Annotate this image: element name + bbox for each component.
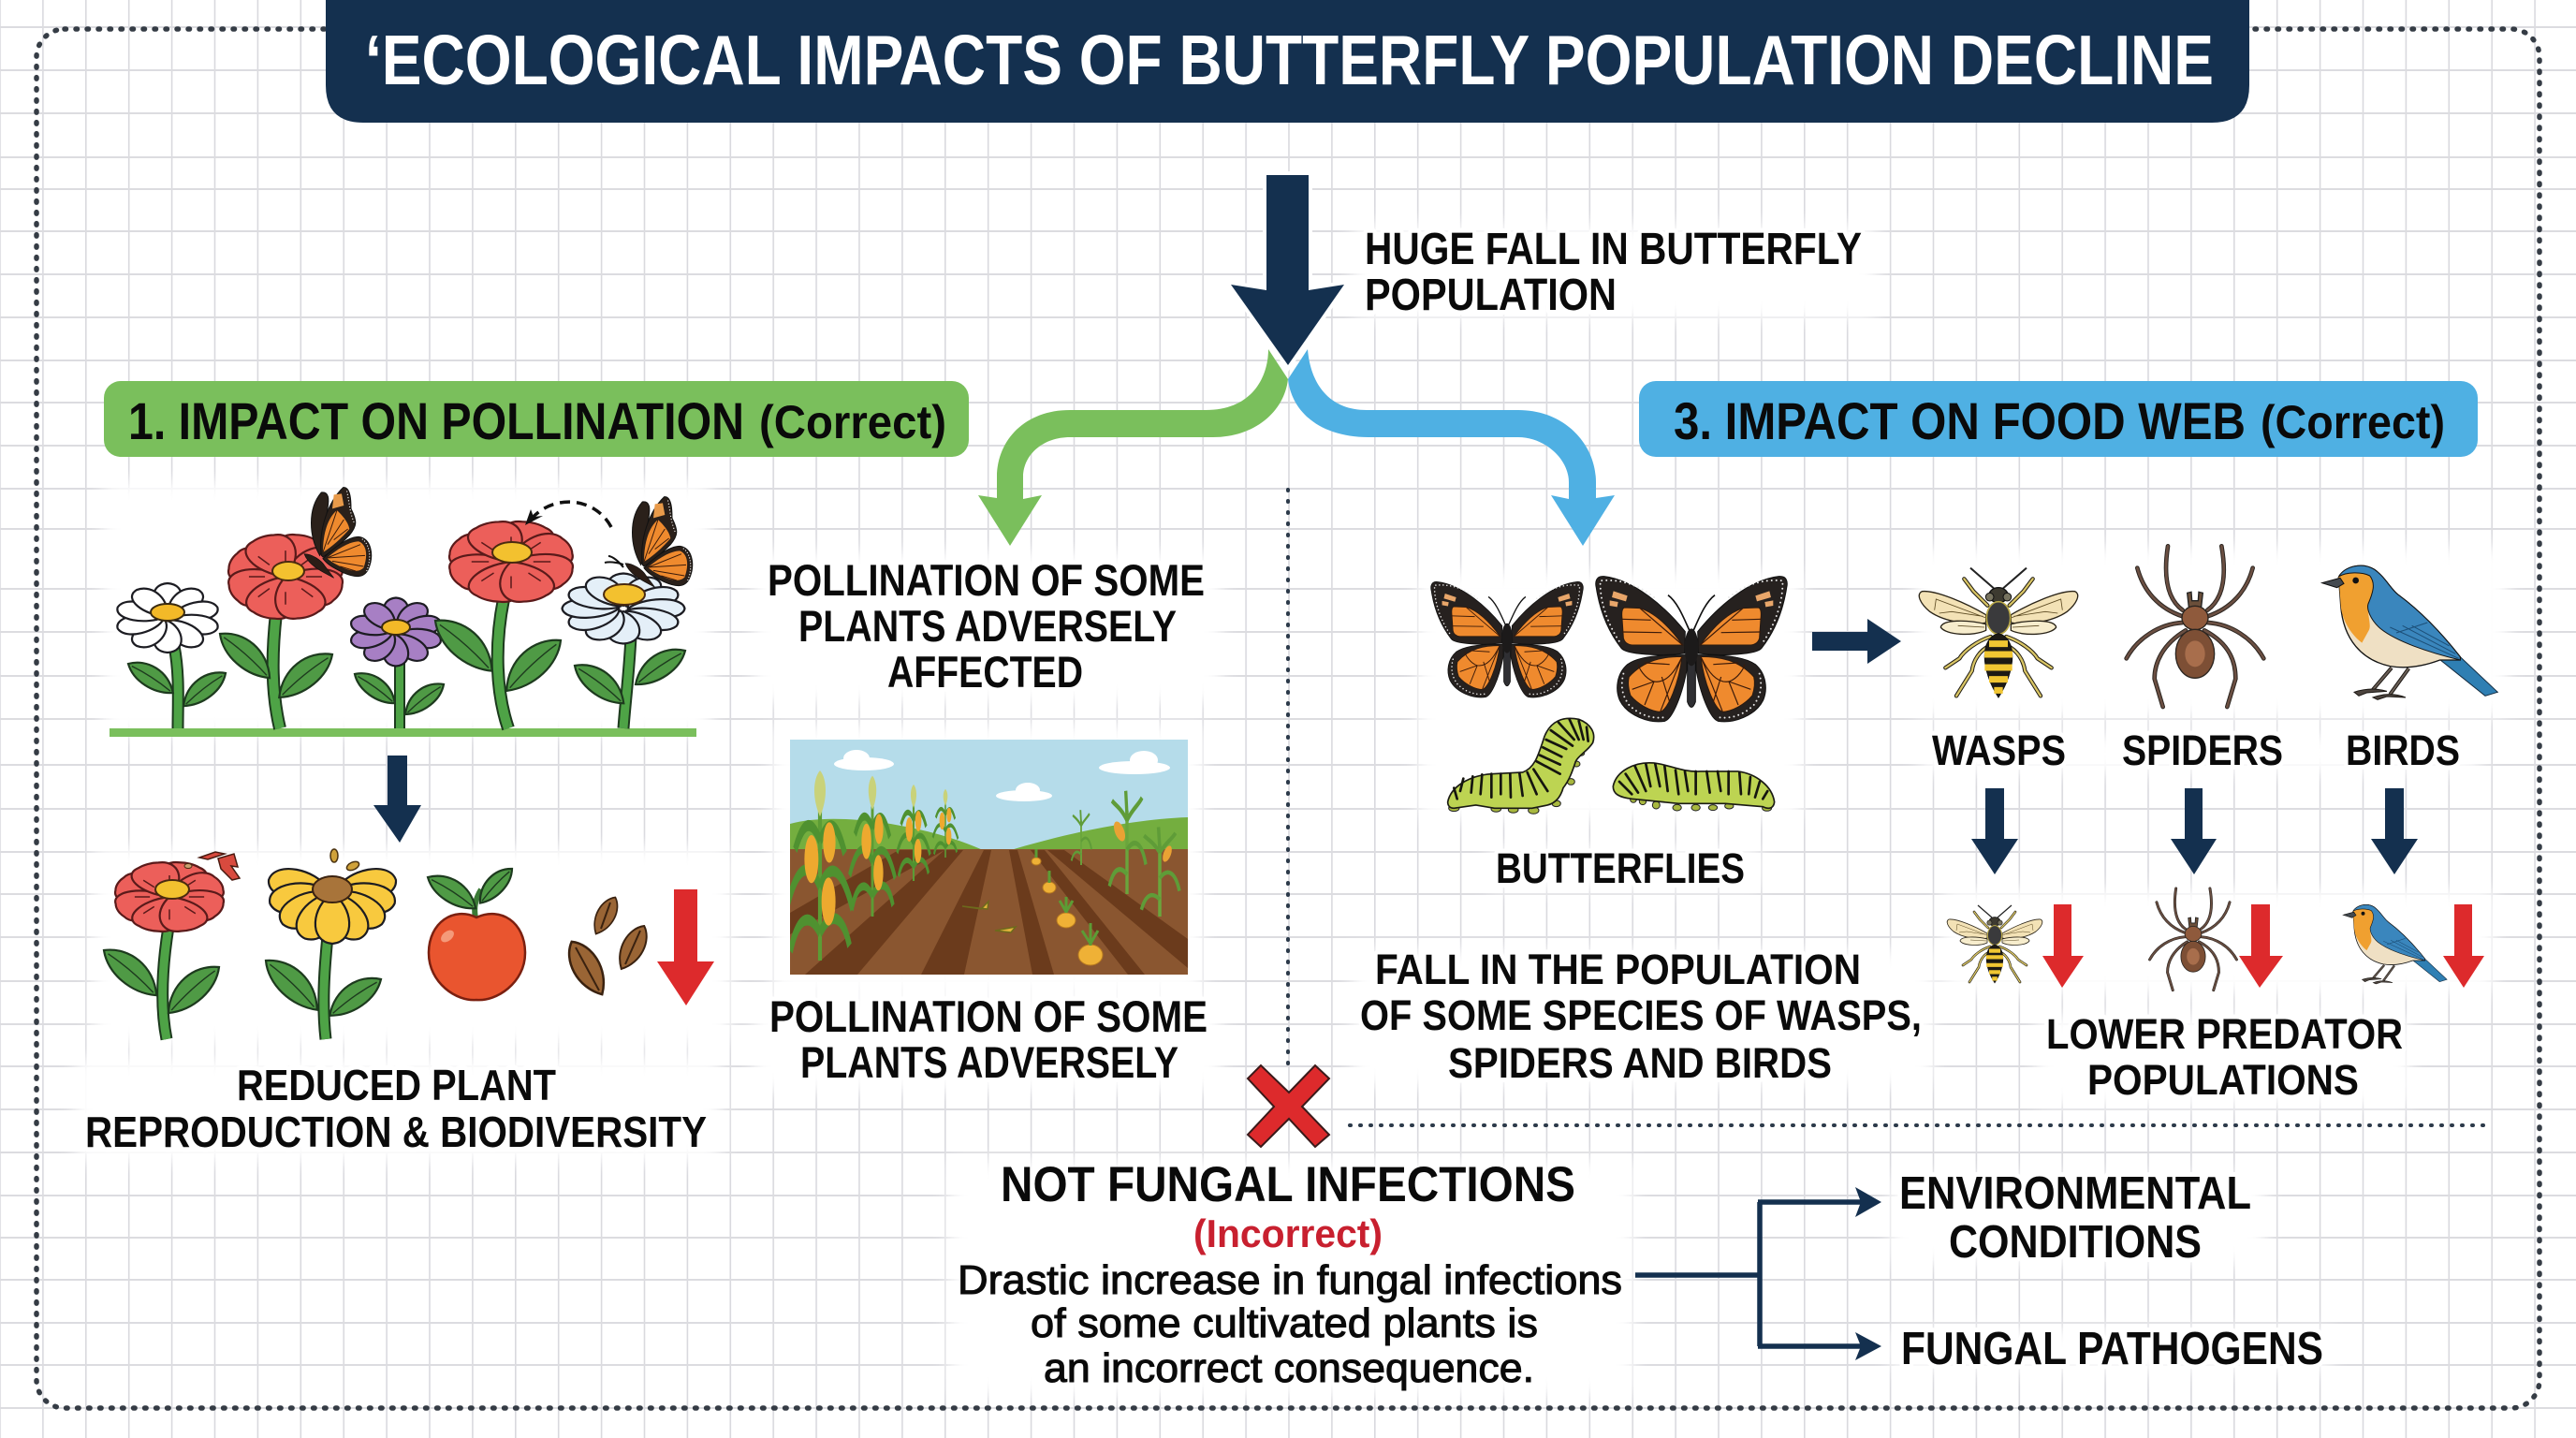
text: pollination affected <box>768 555 1205 697</box>
labels: predators <box>1932 726 2460 774</box>
icon: bird <box>2322 565 2497 699</box>
text: fungal pathogens: FUNGAL PATHOGENS <box>1901 1324 2323 1374</box>
icon: white daisy <box>113 583 231 728</box>
text: pollination affected: POLLINATION OF SOME <box>768 555 1205 605</box>
icon: arched caterpillar <box>1448 718 1594 814</box>
text: pollination affected: PLANTS ADVERSELY <box>798 601 1177 651</box>
heading: impact on pollination: 1. IMPACT ON POLLINATION <box>128 391 744 450</box>
label: butterflies: BUTTERFLIES <box>1496 844 1745 892</box>
arrow: red decrease <box>657 889 714 1005</box>
icon: apple <box>423 862 525 1000</box>
label: huge fall in butterfly population: POPULATION <box>1365 271 1617 320</box>
labels: predators: SPIDERS <box>2122 726 2283 774</box>
panel: impact on food web <box>1360 381 2497 1104</box>
icon: crawling caterpillar <box>1613 763 1775 811</box>
arrow: pollination down to outcomes <box>373 756 421 843</box>
label: huge fall in butterfly population <box>1365 225 1862 320</box>
text: reduced plant reproduction: REDUCED PLANT <box>237 1061 556 1109</box>
text: explanation <box>958 1257 1622 1391</box>
label: huge fall in butterfly population: HUGE FALL IN BUTTERFLY <box>1365 225 1862 274</box>
label: incorrect: (Incorrect) <box>1193 1211 1383 1255</box>
text: fall in population: OF SOME SPECIES OF WASPS, <box>1360 991 1922 1039</box>
icon: wasp <box>1919 568 2078 697</box>
heading: impact on food web <box>1639 381 2478 457</box>
text: environmental conditions <box>1899 1168 2251 1268</box>
text: fall in population <box>1360 946 1922 1087</box>
text: environmental conditions: ENVIRONMENTAL <box>1899 1168 2251 1219</box>
blue branch arrow <box>1288 349 1615 546</box>
text: explanation: of some cultivated plants is <box>1031 1300 1538 1346</box>
icon: red cross <box>1248 1065 1329 1147</box>
text: lower predator populations <box>2046 1010 2403 1104</box>
text: lower predator populations: POPULATIONS <box>2087 1056 2359 1104</box>
icon: purple flower <box>347 597 448 728</box>
icon: seeds <box>561 893 653 1001</box>
icon: yellow flower losing seeds <box>257 849 399 1039</box>
title banner: ‘ECOLOGICAL IMPACTS OF BUTTERFLY POPULATION DECLINE <box>365 21 2214 99</box>
text: fall in population: FALL IN THE POPULATION <box>1375 946 1861 993</box>
connector: branching arrows <box>1635 1187 1881 1360</box>
arrow: butterflies to predators <box>1812 619 1901 664</box>
ground line <box>110 728 696 737</box>
heading: impact on pollination: (Correct) <box>759 396 946 448</box>
labels: predators: BIRDS <box>2346 726 2460 774</box>
icon: large monarch butterfly <box>1596 577 1787 722</box>
icon: spider <box>2127 546 2263 707</box>
text: reduced plant reproduction <box>85 1061 707 1156</box>
panel: pollination of crops <box>768 555 1208 1087</box>
text: environmental conditions: CONDITIONS <box>1949 1217 2202 1268</box>
text: reduced plant reproduction: REPRODUCTION & BIODIVERSITY <box>85 1108 707 1156</box>
heading: impact on food web: (Correct) <box>2261 396 2445 448</box>
text: lower predator populations: LOWER PREDATOR <box>2046 1010 2403 1058</box>
text: explanation: an incorrect consequence. <box>1044 1345 1534 1391</box>
icon: small bird <box>2343 904 2447 984</box>
heading: impact on pollination <box>104 381 969 457</box>
green branch arrow <box>978 349 1288 546</box>
arrows: predator decline <box>1971 788 2418 874</box>
icon: red flower with flight arrow <box>427 502 611 728</box>
text: fall in population: SPIDERS AND BIRDS <box>1448 1039 1832 1087</box>
icon: small spider <box>2150 888 2236 990</box>
icon: pale blue daisy with butterfly <box>562 497 693 728</box>
panel: impact on pollination <box>85 381 969 1156</box>
arrows: red decrease <box>2042 904 2484 988</box>
icon: red flower with butterfly <box>212 488 372 728</box>
icon: small wasp <box>1947 905 2042 983</box>
text: pollination adversely: POLLINATION OF SOME <box>769 991 1208 1041</box>
vertical dotted divider <box>1286 490 1290 1065</box>
labels: predators: WASPS <box>1932 726 2066 774</box>
icon: small monarch butterfly <box>1431 581 1583 697</box>
heading: not fungal infections: NOT FUNGAL INFECTIONS <box>1001 1157 1575 1212</box>
text: explanation: Drastic increase in fungal infections <box>958 1257 1622 1303</box>
heading: impact on food web: 3. IMPACT ON FOOD WEB <box>1674 391 2246 450</box>
icon: wilted red flower <box>96 852 240 1039</box>
text: pollination adversely <box>769 991 1208 1087</box>
text: pollination adversely: PLANTS ADVERSELY <box>800 1037 1178 1087</box>
text: pollination affected: AFFECTED <box>887 647 1083 697</box>
horizontal dotted divider <box>1350 1123 2486 1127</box>
title banner <box>326 0 2249 123</box>
central down arrow <box>1231 175 1344 365</box>
panel: not fungal infections <box>958 1065 2323 1391</box>
illustration: cornfield <box>787 740 1188 975</box>
